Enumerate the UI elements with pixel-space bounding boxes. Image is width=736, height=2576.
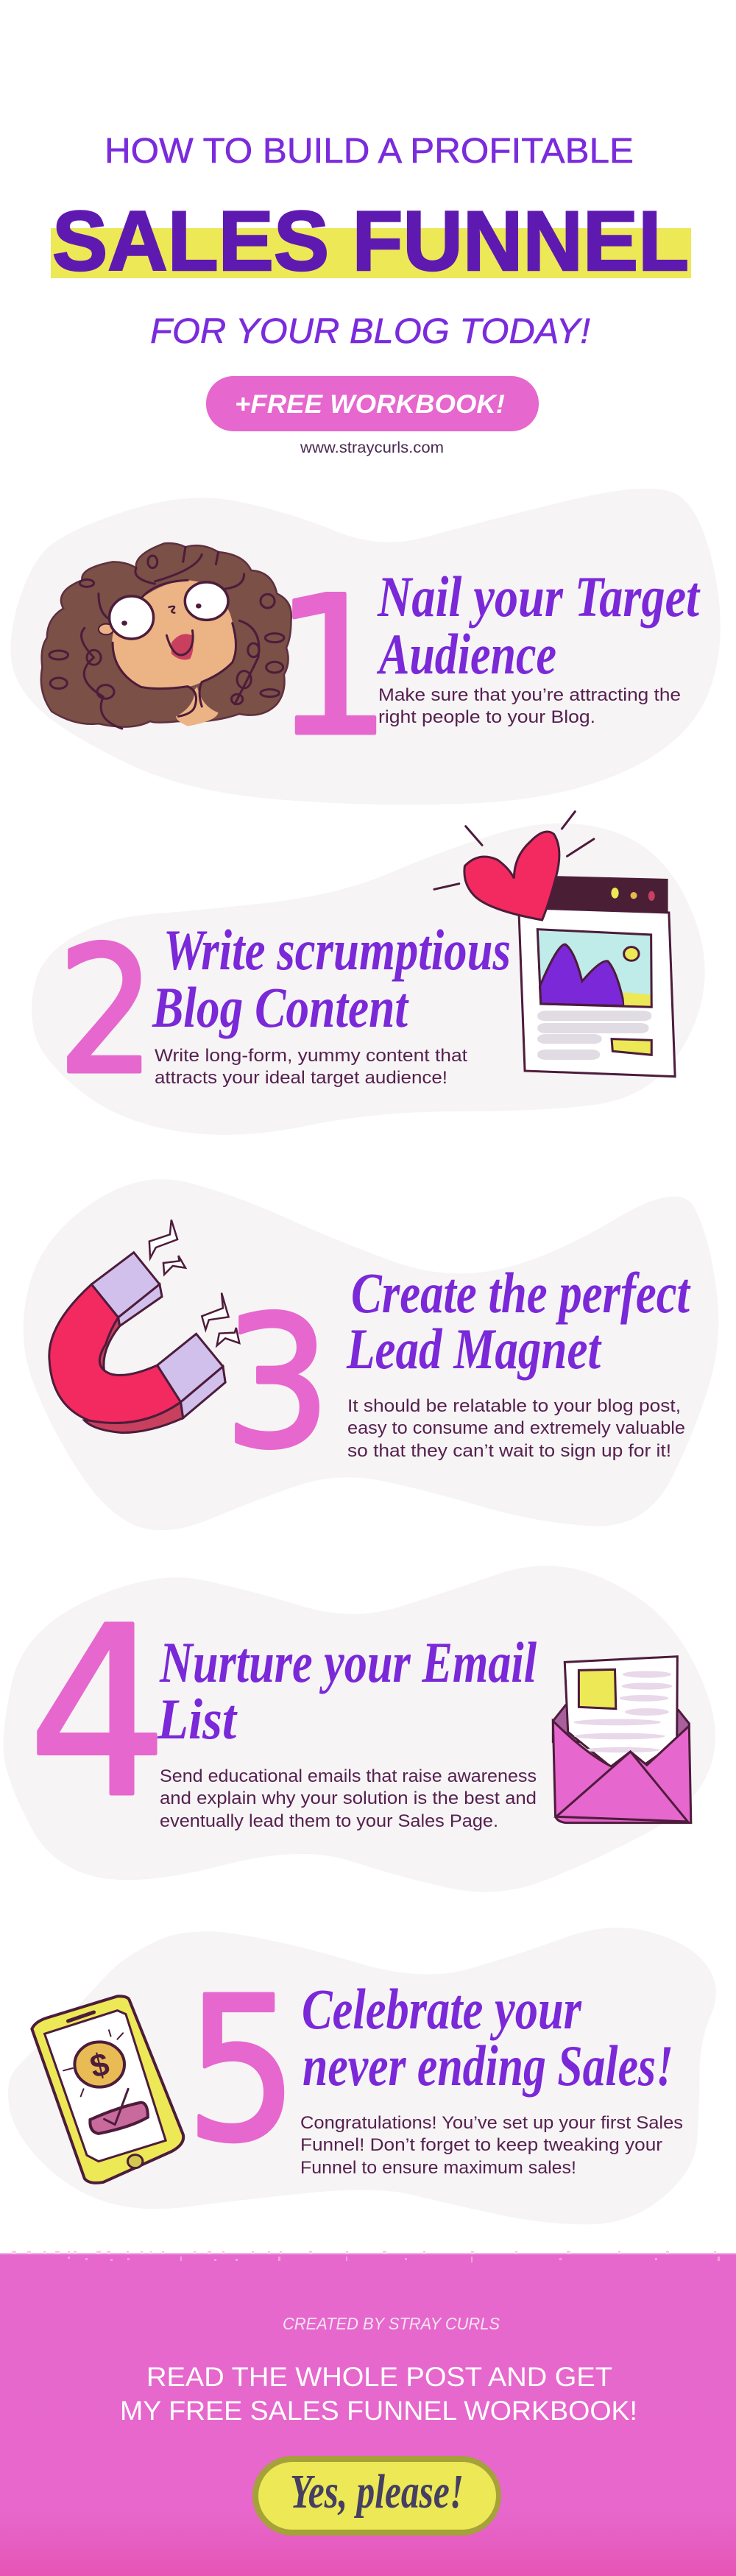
number 1: 1 [274,556,392,779]
number 2: 2 [57,910,155,1114]
yes please button [252,2456,501,2536]
description: Funnel to ensure maximum sales! [300,2158,576,2178]
blob background [11,489,721,804]
panel: step 2 [32,812,705,1135]
description: Make sure that you’re attracting the [378,685,681,705]
heading: Audience [376,622,556,686]
icon: browser window with heart [434,812,675,1077]
blob background [8,1928,716,2224]
description [347,1396,685,1461]
description [155,1046,467,1088]
description: right people to your Blog. [378,707,595,727]
heading: Lead Magnet [346,1317,602,1381]
heading [346,1261,691,1381]
call to action text: READ THE WHOLE POST AND GET [146,2362,612,2392]
blob background [24,1179,718,1530]
description: and explain why your solution is the best and [160,1788,537,1808]
blob background [32,824,705,1135]
panel: step 1 [11,489,721,804]
call to action text: MY FREE SALES FUNNEL WORKBOOK! [120,2396,637,2426]
free workbook pill [206,376,539,431]
description: attracts your ideal target audience! [155,1068,447,1088]
header [51,132,691,456]
blob background [4,1565,715,1892]
description [300,2113,683,2178]
yes please button: Yes, please! [290,2465,464,2519]
heading: Celebrate your [302,1977,582,2041]
heading [152,918,511,1039]
icon: curly-haired face [41,543,291,729]
icon: horseshoe magnet [49,1220,239,1433]
call to action text [120,2362,637,2426]
icon: envelope with letter [553,1657,691,1823]
description: Write long-form, yummy content that [155,1046,467,1066]
description: Congratulations! You’ve set up your first Sales [300,2113,683,2133]
panel: step 4 [4,1565,715,1892]
website url: www.straycurls.com [300,439,444,456]
description: It should be relatable to your blog post, [347,1396,681,1416]
title main: SALES FUNNEL [52,194,689,289]
heading: List [157,1687,238,1751]
heading: Nurture your Email [159,1630,537,1694]
panel: step 5 [8,1928,716,2224]
description [378,685,681,727]
number 3: 3 [224,1278,331,1489]
subtitle: FOR YOUR BLOG TODAY! [150,312,590,351]
description: eventually lead them to your Sales Page. [160,1811,498,1831]
footer background [0,2254,736,2576]
description: Send educational emails that raise awareness [160,1766,537,1786]
description: so that they can’t wait to sign up for it! [347,1441,671,1461]
dollar sign: $ [87,2046,113,2085]
panel: footer [0,2251,736,2576]
icon: phone with coin [32,1996,183,2183]
heading: Write scrumptious [163,918,511,982]
description [160,1766,537,1831]
highlight bar [51,228,691,278]
title line 1: HOW TO BUILD A PROFITABLE [105,132,634,171]
heading: Blog Content [152,975,409,1039]
credit: CREATED BY STRAY CURLS [283,2314,500,2333]
free workbook pill: +FREE WORKBOOK! [235,390,505,419]
heading [157,1630,537,1751]
number 5: 5 [185,1954,298,2186]
description: Funnel! Don’t forget to keep tweaking your [300,2135,662,2155]
panel: step 3 [24,1179,718,1530]
description: easy to consume and extremely valuable [347,1418,685,1438]
heading [302,1977,673,2098]
heading [376,565,701,686]
number 4: 4 [28,1577,168,1849]
